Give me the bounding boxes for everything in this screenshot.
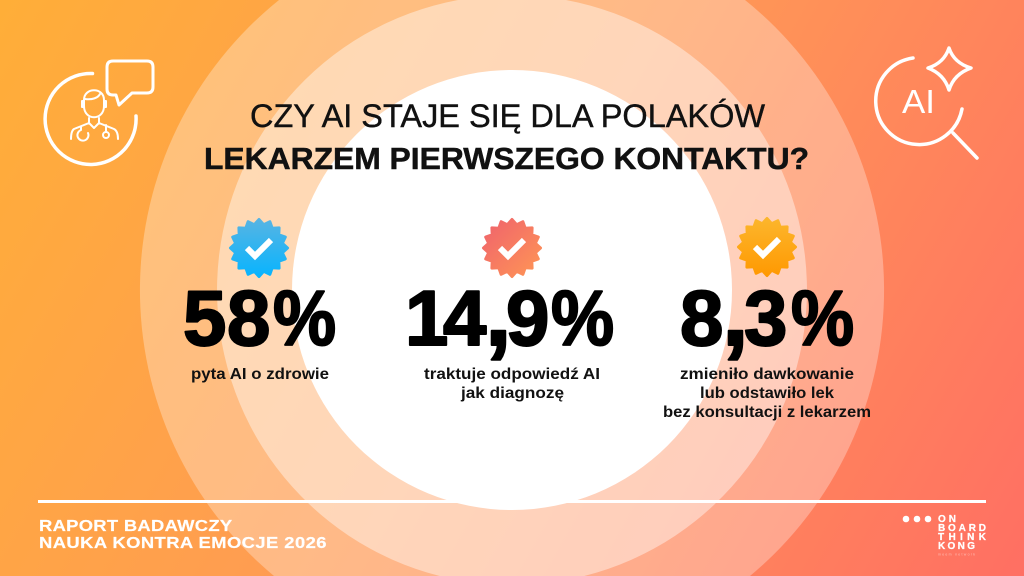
- value: [680, 259, 854, 366]
- title: LEKARZEM PIERWSZEGO KONTAKTU?: [204, 141, 809, 176]
- value: %: [551, 274, 614, 362]
- caption: traktuje odpowiedź AI: [424, 366, 600, 383]
- caption: pyta AI o zdrowie: [191, 366, 329, 383]
- value: 4: [443, 274, 486, 362]
- value: ,: [485, 259, 512, 366]
- stat: 14,9%: [405, 220, 614, 402]
- icon: doctor with speech bubble: [45, 61, 153, 164]
- value: 9: [506, 274, 549, 362]
- value: [405, 259, 614, 366]
- value: %: [791, 274, 854, 362]
- title: CZY AI STAJE SIĘ DLA POLAKÓW: [250, 98, 766, 134]
- stat: 8,3%: [663, 218, 871, 421]
- footer: report name: [39, 516, 326, 552]
- icon: AI magnifier with sparkle: [876, 48, 977, 158]
- value: %: [273, 274, 336, 362]
- logo: Onboard Think Kong: ON: [938, 514, 956, 525]
- title: [204, 98, 809, 176]
- badge: orange check: [738, 218, 796, 276]
- value: [183, 274, 336, 362]
- value: 5: [183, 274, 226, 362]
- logo: Onboard Think Kong: meem network: [938, 552, 975, 556]
- footer: report name: RAPORT BADAWCZY: [39, 516, 233, 535]
- badge: blue check: [230, 220, 288, 276]
- logo: Onboard Think Kong: THINK: [938, 532, 987, 543]
- value: ,: [722, 259, 749, 366]
- label: AI: AI: [902, 83, 935, 120]
- stat: 14,9%: jak diagnozę: [460, 385, 564, 402]
- caption: zmieniło dawkowanie: [680, 366, 854, 383]
- stat: 8,3%: lub odstawiło lek: [700, 385, 834, 402]
- value: 8: [227, 274, 270, 362]
- stat: 8,3%: bez konsultacji z lekarzem: [663, 404, 871, 421]
- value: 3: [744, 274, 787, 362]
- concentric circles: [140, 0, 884, 576]
- logo: Onboard Think Kong: BOARD: [938, 523, 986, 534]
- footer: report name: NAUKA KONTRA EMOCJE 2026: [39, 533, 327, 552]
- logo: Onboard Think Kong: [903, 514, 987, 556]
- logo: Onboard Think Kong: KONG: [938, 541, 975, 552]
- value: 1: [405, 274, 448, 362]
- value: 8: [680, 274, 723, 362]
- badge: red check: [484, 220, 540, 276]
- stat: 58%: [183, 220, 336, 383]
